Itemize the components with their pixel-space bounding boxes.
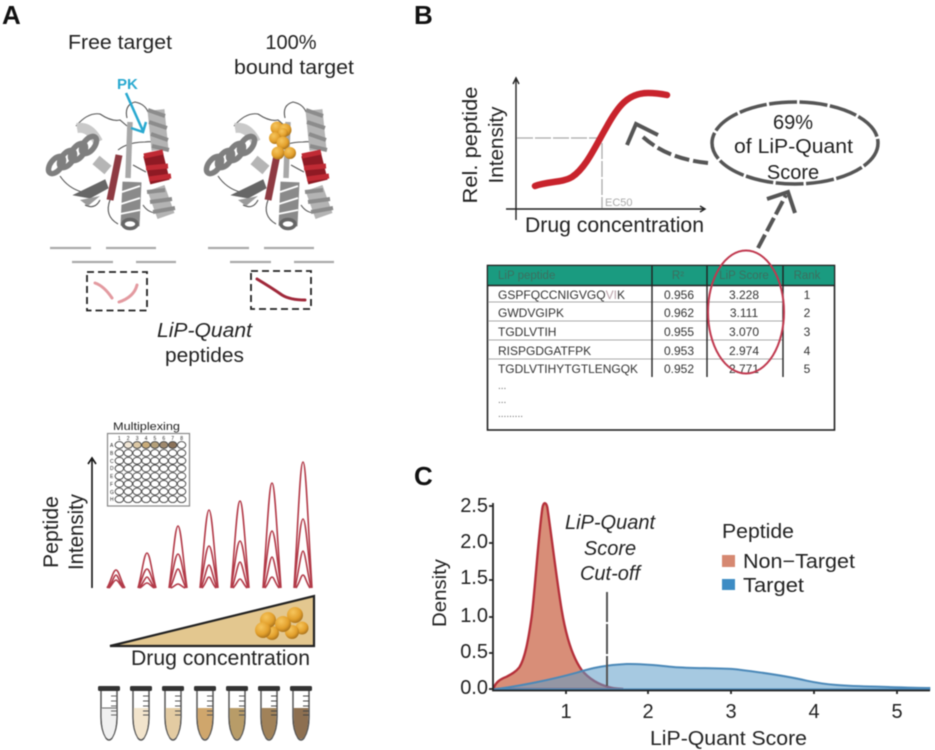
caption: LiP-Quant peptides: LiP-Quant xyxy=(157,320,254,342)
well plate: A xyxy=(110,443,114,449)
density: non-target xyxy=(493,503,623,689)
annotation: LiP-Quant Score Cut-off xyxy=(565,512,656,585)
y tick labels: 1.5 xyxy=(460,567,488,589)
table: ranked LiP peptides: 0.955 xyxy=(664,325,694,339)
table: ranked LiP peptides: LiP Score xyxy=(719,270,769,282)
axes: density plot xyxy=(489,503,930,694)
well plate: 5 xyxy=(154,436,157,442)
density areas xyxy=(493,503,929,689)
well plate: 2 xyxy=(127,436,130,442)
table: ranked LiP peptides: 0.962 xyxy=(664,306,694,320)
axis label: Peptide Intensity xyxy=(40,494,88,570)
axis label: Density: Density xyxy=(430,558,451,627)
well plate: 7 xyxy=(171,436,174,442)
table: ranked LiP peptides: 0.956 xyxy=(664,288,694,302)
table: ranked LiP peptides: GSPFQCCNIGVGQVIK xyxy=(498,288,625,302)
legend: Peptide xyxy=(722,521,794,543)
panel label C: C xyxy=(414,461,433,491)
axis label: Rel. peptide Intensity xyxy=(459,86,508,204)
table: ranked LiP peptides: 3.228 xyxy=(729,288,759,302)
callout: 69% of LiP-Quant Score: 69% xyxy=(773,112,813,134)
heading: free target: Free target xyxy=(68,32,172,54)
panel label A: A xyxy=(2,0,21,30)
table: ranked LiP peptides: 2.771 xyxy=(729,362,759,376)
well plate xyxy=(108,434,190,506)
annotation: LiP-Quant Score Cut-off: Score xyxy=(584,538,636,560)
annotation: LiP-Quant Score Cut-off: Cut-off xyxy=(580,563,642,585)
x tick labels xyxy=(560,701,903,723)
dose-response curve xyxy=(535,93,667,186)
panel label B: B xyxy=(414,0,433,30)
legend xyxy=(722,521,855,597)
axis label: Drug concentration: Drug concentration xyxy=(525,214,704,237)
table: ranked LiP peptides: ... xyxy=(498,381,506,392)
icon: drug molecule xyxy=(255,607,308,640)
table: ranked LiP peptides: 2 xyxy=(804,306,811,320)
label: PK: PK xyxy=(117,76,138,93)
peptide fragments: bound xyxy=(208,248,334,262)
x tick labels: 5 xyxy=(891,701,903,723)
table: ranked LiP peptides: 2.974 xyxy=(729,344,759,358)
icon: drug in binding pocket xyxy=(269,122,296,160)
axis arrow: peptide intensity xyxy=(88,458,96,588)
dose-response axes xyxy=(506,78,705,220)
well plate: C xyxy=(110,459,114,465)
axis label: LiP-Quant Score: LiP-Quant Score xyxy=(650,728,807,750)
caption: LiP-Quant peptides xyxy=(157,320,254,367)
callout: 69% of LiP-Quant Score: Score xyxy=(767,162,819,184)
drug concentration wedge xyxy=(110,596,314,646)
heading: bound target xyxy=(234,32,354,79)
table: ranked LiP peptides: GWDVGIPK xyxy=(498,306,564,320)
well plate: 8 xyxy=(180,436,183,442)
panel C: density plot xyxy=(414,461,930,750)
table: ranked LiP peptides: ......... xyxy=(498,409,523,420)
well plate: H xyxy=(110,497,114,503)
panel B: dose response and table xyxy=(414,0,878,430)
arrow: PK cleavage xyxy=(126,93,146,132)
EC50 guide lines xyxy=(517,138,602,208)
x tick labels: 4 xyxy=(808,701,820,723)
peptide fragments: free xyxy=(50,248,176,262)
protein: bound target ribbon xyxy=(204,102,333,228)
label: Drug concentration: Drug concentration xyxy=(131,647,310,670)
table: ranked LiP peptides: R² xyxy=(672,270,684,282)
table: ranked LiP peptides: LiP peptide xyxy=(498,270,555,282)
well plate: E xyxy=(110,474,114,480)
table: ranked LiP peptides xyxy=(487,265,834,430)
x tick labels: 1 xyxy=(560,701,572,723)
table: ranked LiP peptides: ... xyxy=(498,395,506,406)
axis label: Peptide Intensity: Intensity xyxy=(65,494,88,570)
well plate: 4 xyxy=(145,436,148,442)
well plate: G xyxy=(110,490,114,496)
table: ranked LiP peptides: 0.952 xyxy=(664,362,694,376)
table: ranked LiP peptides: TGDLVTIH xyxy=(498,325,556,339)
legend: Target xyxy=(743,575,804,597)
panel A: target structures xyxy=(2,0,354,367)
peptide intensity peaks xyxy=(107,462,312,588)
axis label: Rel. peptide Intensity: Intensity xyxy=(485,106,508,184)
highlight ellipse: LiP Score column xyxy=(708,250,784,374)
density: target xyxy=(493,664,929,689)
x tick labels: 2 xyxy=(642,701,654,723)
dashed box: bound target profile xyxy=(251,271,311,309)
cut-off line xyxy=(606,592,608,688)
x tick labels: 3 xyxy=(725,701,737,723)
well plate: D xyxy=(110,466,114,472)
table: ranked LiP peptides: 5 xyxy=(804,362,811,376)
caption: LiP-Quant peptides: peptides xyxy=(165,345,244,367)
panel A: multiplexing and intensity xyxy=(40,421,314,740)
well plate: 6 xyxy=(162,436,165,442)
axis label: Rel. peptide Intensity: Rel. peptide xyxy=(459,86,482,204)
label: EC50: EC50 xyxy=(605,197,633,209)
callout: 69% of LiP-Quant Score xyxy=(712,102,878,184)
axis label: Peptide Intensity: Peptide xyxy=(40,496,63,568)
table: ranked LiP peptides: RISPGDGATFPK xyxy=(498,344,591,358)
y tick labels: 0.5 xyxy=(460,641,488,663)
well plate: 1 xyxy=(118,436,121,442)
heading: bound target: bound target xyxy=(234,57,354,79)
heading: bound target: 100% xyxy=(265,32,317,54)
callout: 69% of LiP-Quant Score: of LiP-Quant xyxy=(734,136,853,158)
table: ranked LiP peptides: Rank xyxy=(794,270,821,282)
table: ranked LiP peptides: 0.953 xyxy=(664,344,694,358)
protein: free target ribbon xyxy=(46,102,175,228)
table: ranked LiP peptides: TGDLVTIHYTGTLENGQK xyxy=(498,362,638,376)
table: ranked LiP peptides: 3 xyxy=(804,325,811,339)
y tick labels xyxy=(460,495,488,699)
arrow: table to callout xyxy=(758,192,795,248)
dashed box: free target profile xyxy=(87,272,147,310)
annotation: LiP-Quant Score Cut-off: LiP-Quant xyxy=(565,512,656,534)
arrow: callout to curve xyxy=(627,124,708,163)
y tick labels: 2.5 xyxy=(460,495,488,517)
y tick labels: 1.0 xyxy=(460,605,488,627)
legend: Non−Target xyxy=(743,551,855,573)
well plate: B xyxy=(110,451,114,457)
label: Multiplexing: Multiplexing xyxy=(113,421,180,433)
sample tubes xyxy=(98,686,312,740)
table: ranked LiP peptides: 3.111 xyxy=(730,306,758,320)
y tick labels: 2.0 xyxy=(460,531,488,553)
table: ranked LiP peptides: 3.070 xyxy=(729,325,759,339)
well plate: 3 xyxy=(136,436,139,442)
table: ranked LiP peptides: 1 xyxy=(804,288,811,302)
y tick labels: 0.0 xyxy=(460,677,488,699)
well plate: F xyxy=(110,482,113,488)
table: ranked LiP peptides: 4 xyxy=(804,344,811,358)
